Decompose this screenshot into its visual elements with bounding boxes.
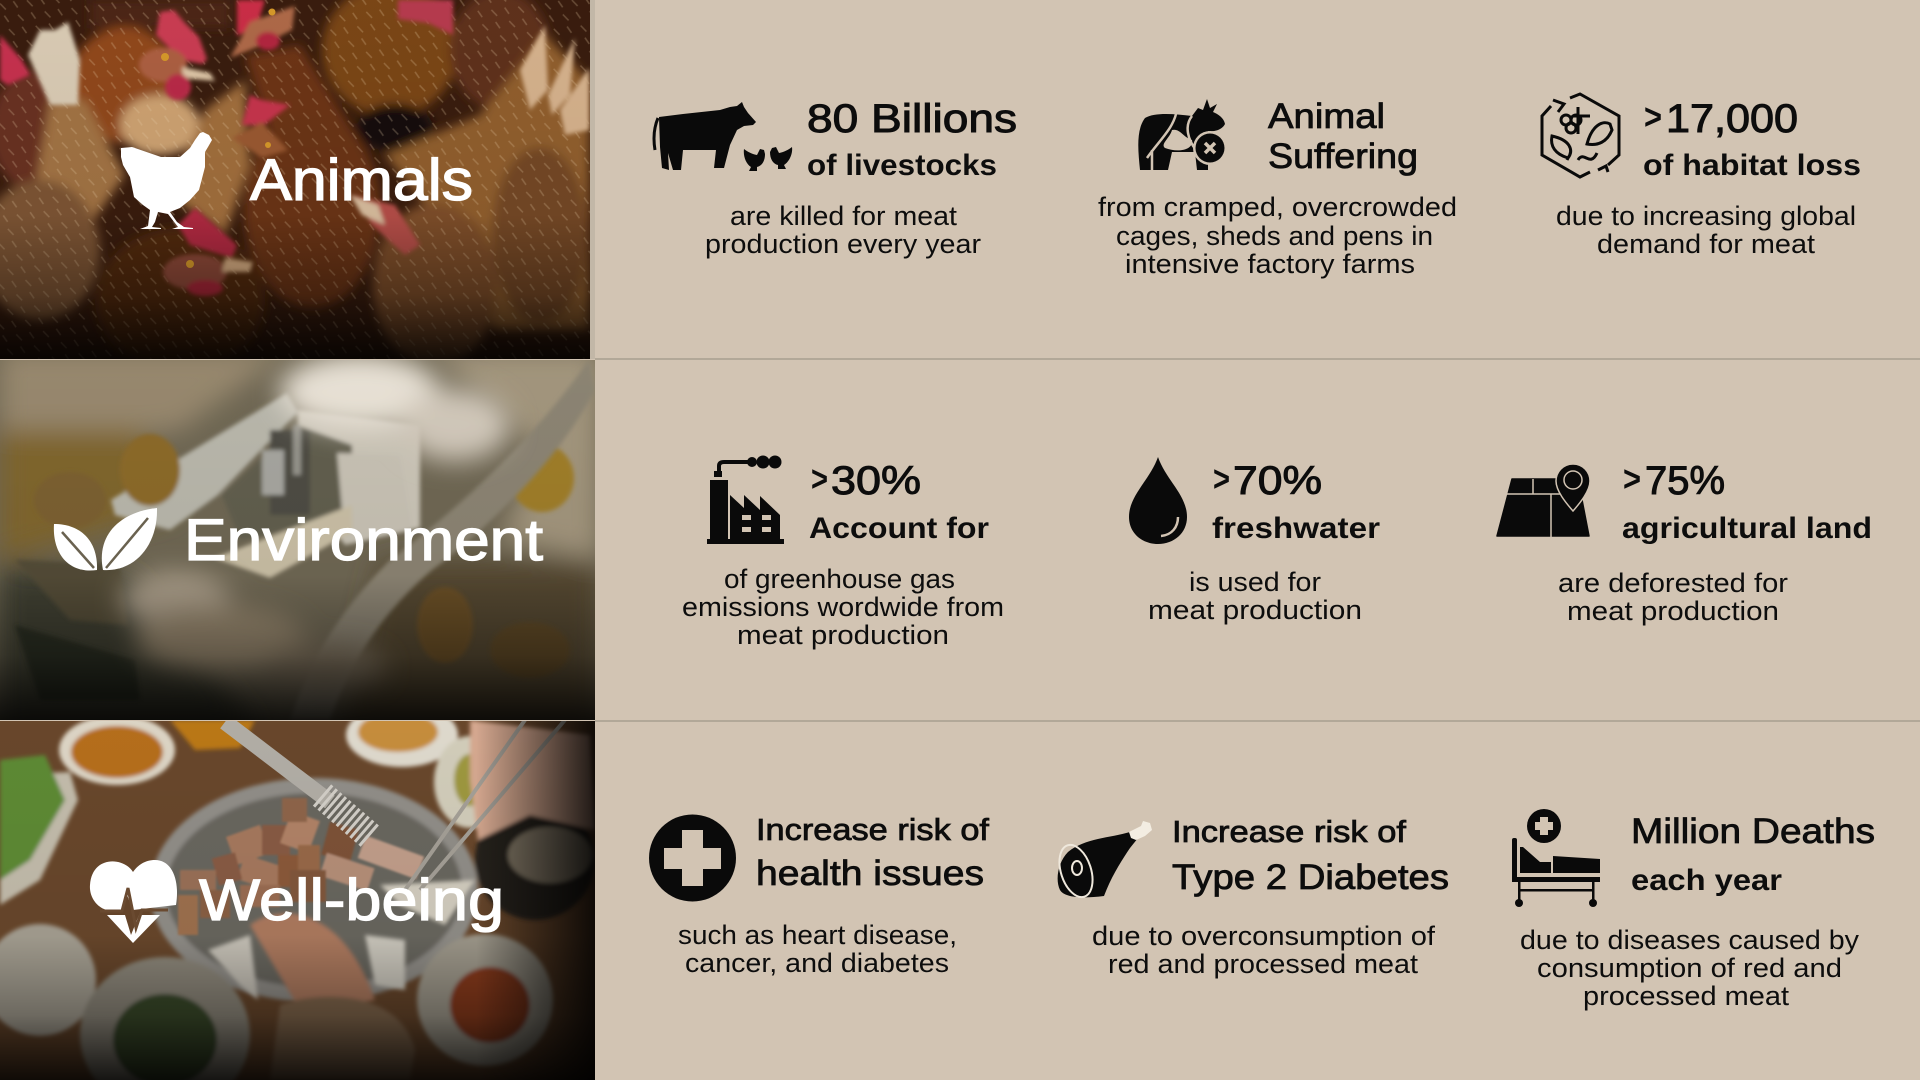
subheading: account for: Account for [809, 512, 989, 545]
description: cages, sheds and pens in [1116, 221, 1433, 251]
heading: well-being: Well-being [199, 868, 504, 933]
icon: cow and chickens [654, 102, 792, 171]
icon: heart with pulse [90, 860, 177, 943]
heading: increase risk of type 2 diabetes: Type 2 Diabetes [1172, 858, 1449, 897]
description [1558, 568, 1788, 626]
description: production every year [705, 229, 981, 259]
description: due to overconsumption of [1092, 921, 1436, 951]
icon: ham [1053, 821, 1152, 901]
panel: type 2 diabetes [1053, 814, 1449, 979]
description [682, 564, 1004, 650]
icon: white leaves [54, 508, 157, 571]
heading: animals: Animals [250, 148, 473, 213]
icon: habitat hexagon [1542, 94, 1619, 177]
panel: livestock statistic [654, 97, 1017, 259]
stat: >17,000: > [1644, 96, 1662, 137]
heading: increase risk of health issues [756, 812, 989, 893]
icon: cow with cross mark [1138, 99, 1227, 170]
description: such as heart disease, [678, 920, 957, 950]
description: meat production [1567, 596, 1779, 626]
description: due to diseases caused by [1520, 925, 1860, 955]
icon: medical cross [649, 814, 736, 902]
heading: environment: Environment [184, 508, 543, 573]
panel: agricultural land statistic [1497, 458, 1872, 626]
description [1098, 192, 1457, 279]
stat: >75%: > [1623, 458, 1641, 499]
photo edge strip [589, 0, 595, 359]
panel: million deaths [1512, 809, 1875, 1011]
stat: >17,000: 17,000 [1666, 97, 1798, 141]
photo: crowded hens [0, 0, 590, 372]
heading: million deaths: Million Deaths [1631, 812, 1875, 851]
panel: greenhouse gas statistic [682, 456, 1004, 650]
description: cancer, and diabetes [685, 948, 949, 978]
heading: increase risk of type 2 diabetes: Increase risk of [1172, 814, 1406, 849]
icon: hospital bed [1512, 809, 1600, 907]
row divider lines [595, 359, 1920, 721]
description: are killed for meat [730, 201, 958, 231]
stat: >30%: > [811, 458, 828, 499]
heading: increase risk of health issues: health issues [756, 854, 984, 893]
subheading: of livestocks: of livestocks [807, 149, 997, 182]
subheading: of habitat loss: of habitat loss [1643, 149, 1861, 182]
heading: increase risk of health issues: Increase risk of [756, 812, 989, 847]
heading: animal suffering: Animal [1268, 97, 1385, 136]
icon: water drop [1129, 457, 1187, 544]
description [678, 920, 957, 978]
description: meat production [1148, 595, 1362, 625]
description: from cramped, overcrowded [1098, 192, 1457, 222]
stat: >70%: > [1213, 458, 1230, 499]
description: red and processed meat [1108, 949, 1419, 979]
panel: health issues [649, 812, 989, 978]
heading: increase risk of type 2 diabetes [1172, 814, 1449, 897]
description [1556, 201, 1856, 259]
panel: animals photo banner [0, 0, 595, 372]
description: are deforested for [1558, 568, 1788, 598]
description: meat production [737, 620, 949, 650]
description: processed meat [1583, 981, 1790, 1011]
description [1148, 567, 1362, 625]
panel: habitat loss [1542, 94, 1861, 259]
description: emissions wordwide from [682, 592, 1004, 622]
icon: fields with map pin [1497, 464, 1590, 537]
subheading: each year: each year [1631, 864, 1782, 897]
photo: shared meal on table [0, 703, 595, 1080]
panel: freshwater statistic [1129, 457, 1380, 625]
panel: animal suffering [1098, 97, 1457, 279]
panel: environment photo banner [0, 350, 600, 730]
icon: white hen [121, 132, 212, 229]
stat: >30%: 30% [831, 459, 921, 503]
photo: factory emissions [0, 350, 600, 730]
stat: 80 billions: 80 Billions [807, 97, 1017, 141]
description: due to increasing global [1556, 201, 1856, 231]
stat: >75%: 75% [1645, 459, 1725, 503]
description: of greenhouse gas [724, 564, 955, 594]
description [1520, 925, 1860, 1011]
description: intensive factory farms [1125, 249, 1415, 279]
description: consumption of red and [1537, 953, 1842, 983]
description: is used for [1189, 567, 1321, 597]
panel: well-being photo banner [0, 703, 595, 1080]
subheading: agricultural land: agricultural land [1622, 512, 1872, 545]
description: demand for meat [1597, 229, 1816, 259]
heading: animal suffering [1268, 97, 1418, 176]
heading: animal suffering: Suffering [1268, 137, 1418, 176]
subheading: freshwater: freshwater [1212, 512, 1380, 545]
description [705, 201, 981, 259]
icon: factory [707, 456, 784, 544]
stat: >70%: 70% [1233, 459, 1322, 503]
description [1092, 921, 1436, 979]
